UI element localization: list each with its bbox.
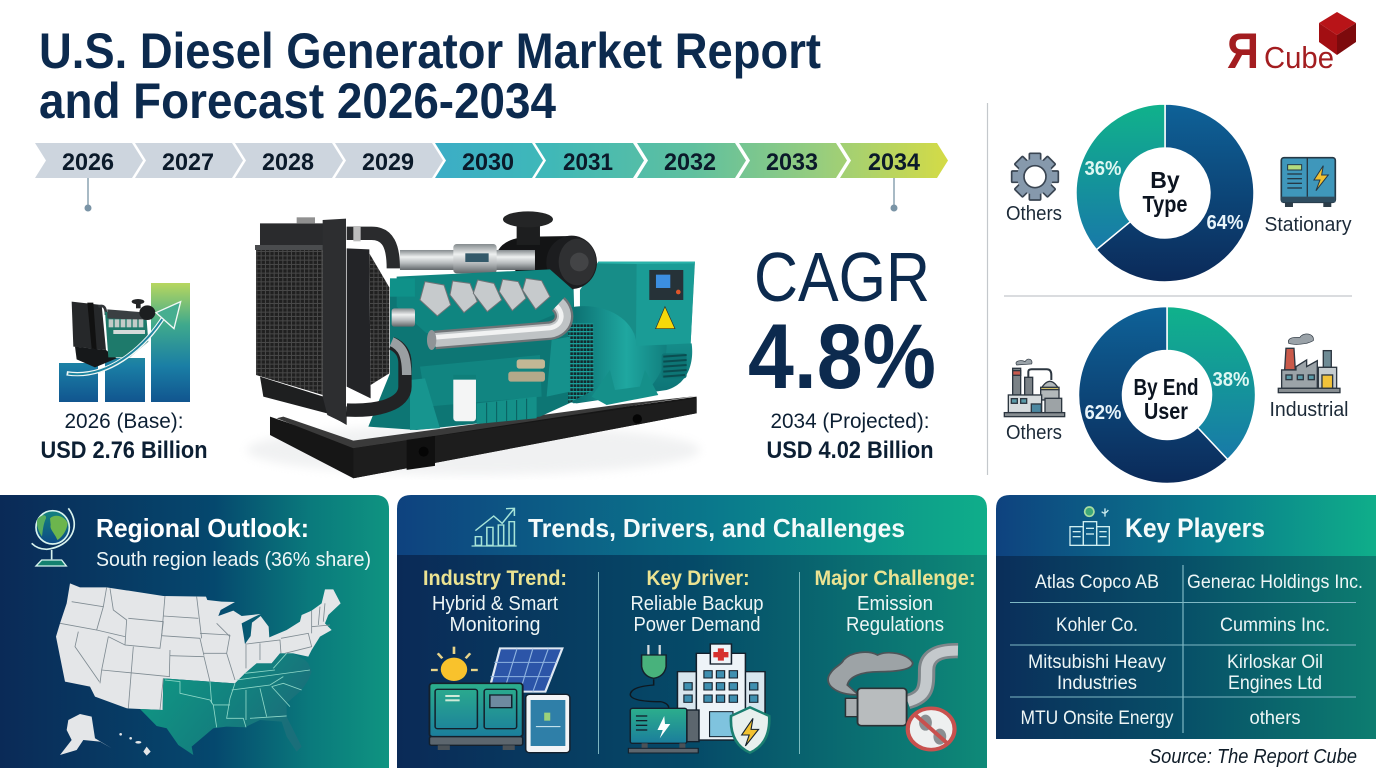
table: company names: Cummins Inc. [1220, 615, 1330, 636]
text: industry trend: Industry Trend: [423, 567, 567, 590]
label: others (type): Others [1006, 203, 1062, 225]
CAGR value: CAGR [754, 238, 930, 316]
icon: gear [1012, 153, 1058, 200]
heading: key players: Key Players [1125, 513, 1265, 543]
label: 2026 base value: USD 2.76 Billion [40, 437, 208, 464]
panel: trends, drivers, and challenges [397, 495, 987, 768]
title: U.S. Diesel Generator Market Report [39, 23, 821, 79]
icon: refinery [1004, 359, 1065, 417]
heading: trends: Trends, Drivers, and Challenges [528, 513, 905, 543]
table: company names [1020, 572, 1363, 729]
timeline arrows: 2030 [462, 149, 514, 176]
donut chart: by end user: By End [1134, 374, 1198, 400]
donut chart: by type [1076, 104, 1254, 282]
label: 2026 base value: 2026 (Base): [64, 410, 184, 433]
timeline arrows: 2031 [563, 149, 613, 176]
logo: RCube: Cube [1264, 40, 1334, 75]
icon: plug, hospital and backup generator [628, 644, 769, 753]
table: company names: Kohler Co. [1056, 615, 1138, 636]
donut chart: by type: 36% [1084, 158, 1122, 180]
text: key driver: Key Driver: [646, 567, 750, 590]
label: industrial: Industrial [1270, 399, 1348, 421]
label: stationary: Stationary [1264, 214, 1352, 236]
table: company names: Kirloskar Oil [1227, 652, 1323, 673]
text: major challenge: Major Challenge: [814, 567, 976, 590]
subheading: south share: South region leads (36% share) [96, 549, 371, 571]
donut chart: by type: 64% [1206, 212, 1244, 234]
label: 2034 projected value [766, 410, 934, 464]
icon: buildings and gear [1070, 507, 1109, 545]
source note: Source: The Report Cube [1149, 746, 1357, 768]
text: industry trend: Hybrid & Smart [432, 593, 558, 615]
table: company names: MTU Onsite Energy [1020, 708, 1174, 729]
title [39, 23, 821, 129]
connector: 2026 [85, 178, 91, 211]
timeline arrows: 2034 [868, 149, 921, 176]
donut chart: by type: By [1150, 167, 1180, 193]
table: company names: Generac Holdings Inc. [1187, 572, 1363, 593]
label: others (end user): Others [1006, 422, 1062, 444]
icon: globe [32, 508, 74, 566]
logo: RCube [1227, 12, 1356, 79]
donut chart: by type: Type [1142, 191, 1188, 217]
donut chart: by end user: User [1144, 398, 1188, 424]
heading: regional outlook: Regional Outlook: [96, 513, 309, 543]
timeline arrows: 2033 [766, 149, 818, 176]
text: key driver: Power Demand [634, 614, 760, 636]
table: company names: others [1250, 708, 1300, 729]
text: key driver [630, 567, 764, 636]
label: 2026 base value [40, 410, 208, 464]
text: major challenge: Emission [857, 593, 933, 615]
icon: hybrid generator with solar and tablet [429, 647, 570, 753]
CAGR value [748, 238, 936, 408]
icon: trend chart [472, 508, 517, 546]
table: company names: Mitsubishi Heavy [1028, 652, 1166, 673]
panel: regional outlook [0, 495, 389, 768]
icon: exhaust pipe with emission ban [828, 651, 958, 750]
icon: stationary generator [1281, 158, 1335, 207]
donut chart: by end user: 38% [1212, 369, 1250, 391]
title: and Forecast 2026-2034 [39, 73, 556, 129]
table: company names: Atlas Copco AB [1035, 572, 1159, 593]
icon: growth bars with engine [59, 283, 190, 402]
timeline arrows: 2026 [62, 149, 114, 176]
timeline arrows: 2029 [362, 149, 414, 176]
table: company names: Industries [1057, 673, 1137, 694]
timeline arrows: 2032 [664, 149, 716, 176]
timeline arrows [35, 143, 948, 178]
CAGR value: 4.8% [748, 306, 936, 408]
donut chart: by end user: 62% [1084, 402, 1122, 424]
timeline arrows: 2027 [162, 149, 214, 176]
connector: 2034 [891, 178, 897, 211]
text: major challenge [814, 567, 976, 636]
illustration: diesel generator [247, 211, 700, 478]
text: industry trend: Monitoring [450, 614, 540, 636]
table: company names: Engines Ltd [1228, 673, 1322, 694]
label: 2034 projected value: 2034 (Projected): [770, 410, 930, 433]
text: major challenge: Regulations [846, 614, 944, 636]
donut chart: by end user [1079, 306, 1256, 483]
timeline arrows: 2028 [262, 149, 314, 176]
label: 2034 projected value: USD 4.02 Billion [766, 437, 934, 464]
text: industry trend [423, 567, 567, 636]
icon: factory [1278, 334, 1340, 393]
map: united states [56, 583, 341, 756]
panel: key players [996, 495, 1376, 739]
logo: RCube: Я [1227, 23, 1259, 79]
text: key driver: Reliable Backup [630, 593, 764, 615]
